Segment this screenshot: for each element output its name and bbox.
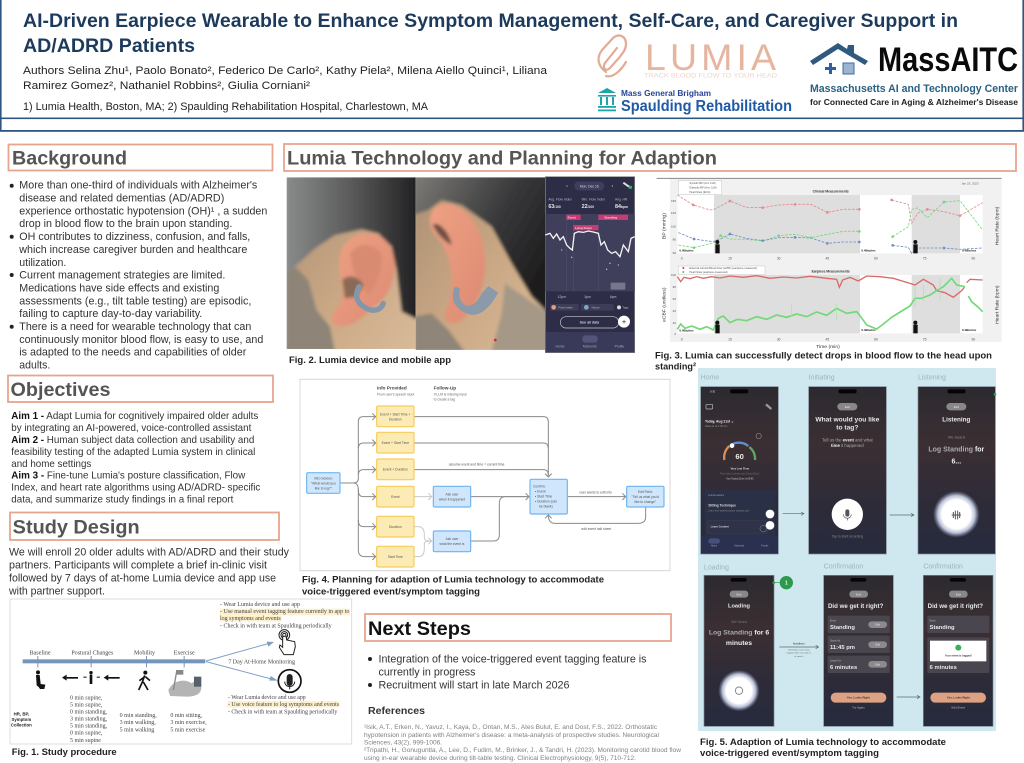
app screenshot: Home <box>592 306 600 310</box>
logo: MassAITC <box>810 41 1019 107</box>
app screenshot: Min. Flow Index <box>582 198 605 202</box>
phone: initiating: time it happened <box>831 443 864 448</box>
text block: background bullets: More than one-third of individuals with Alzheimer's <box>19 180 257 192</box>
text block: next steps: Integration of the voice-triggered event tagging feature is <box>378 654 646 666</box>
text block: next steps <box>368 654 646 692</box>
text block: objectives: feasibility testing of the adapted Lumia system in clinical <box>11 447 255 458</box>
figure 4: flowchart: Ask user <box>446 492 459 496</box>
figure 4: flowchart: Ask user <box>446 537 459 541</box>
text block: background bullets: continuously monitor blood flow, is easy to use, and <box>19 334 263 346</box>
text block: background bullets: experience orthostatic hypotension (OH)¹ , a sudden <box>19 205 267 217</box>
heading: Objectives <box>8 376 273 402</box>
figure 4: flowchart: Info Provided <box>377 386 407 391</box>
heading: Lumia Technology <box>284 144 1016 171</box>
text block: background bullets: utilization. <box>19 257 66 269</box>
text block: background bullets: disease and related dementias (AD/ADRD) <box>19 192 224 204</box>
figure 1: study procedure diagram: 0 min supine, <box>70 695 103 701</box>
icon: green step marker <box>772 576 793 589</box>
app screenshot: Event <box>568 216 576 220</box>
figure 4: flowchart: If LLM is missing input <box>434 393 467 397</box>
figure 3: blood-flow chart: 40 <box>673 309 676 313</box>
icon: microphone <box>278 670 301 692</box>
references: Sciences, 43(2), 999-1006. <box>364 740 442 746</box>
figure 4: flowchart: Start Time <box>388 555 403 559</box>
figure 5: app adaption panel <box>698 368 996 731</box>
figure 1: study procedure diagram: 3 min standing, <box>70 717 108 723</box>
app screenshot: Avg. Flow Index <box>548 198 572 202</box>
phone: listening: Listening <box>942 417 971 424</box>
arrow: autodirect <box>779 642 819 658</box>
figure 4: flowchart: like to log?" <box>315 487 333 491</box>
upper row of screens <box>701 374 996 554</box>
text block: objectives: and home settings <box>11 459 91 470</box>
figure 3: blood-flow chart: 90 <box>971 337 975 341</box>
phone: confirmation tagged: Standing <box>930 625 955 631</box>
app screenshot: Tags <box>622 306 629 310</box>
figure 4: flowchart: Duration <box>389 525 402 529</box>
connectors <box>341 413 646 560</box>
arrow: autodirect: triggered after 3 seconds of <box>787 652 811 655</box>
phone: home: 9:30 <box>710 390 716 394</box>
phone: home: 60 <box>735 452 744 461</box>
figure 4: flowchart: edit event half sheet <box>581 527 611 531</box>
phone: home: Lumia Lessons <box>708 495 725 497</box>
figure 4: flowchart: Event <box>391 495 400 499</box>
phone: home <box>701 387 778 554</box>
phone: confirmation: Edit <box>875 623 880 627</box>
text block: background bullets: failing to capture day-to-day variability. <box>19 308 202 320</box>
figure 4: flowchart: Event + Start Time + <box>380 412 411 416</box>
app screenshot: Flow Index <box>558 306 573 310</box>
figure 1: study procedure diagram: 5 min standing, <box>70 724 108 730</box>
text block: next steps: Recruitment will start in late March 2026 <box>378 680 570 692</box>
arrow <box>890 513 914 517</box>
references <box>364 705 681 762</box>
figure 1: study procedure diagram: HR, BP, <box>14 711 29 716</box>
app screenshot: Avg. HR <box>615 198 628 202</box>
phone: home: Data as of 1:30 pm <box>705 424 728 428</box>
figure 3: blood-flow chart <box>657 178 1002 350</box>
lower row of screens: Loading <box>704 564 729 571</box>
phone: loading: Exit <box>737 593 742 597</box>
text block: objectives: by integrating an AI-powered, voice-controlled assistant <box>11 423 251 434</box>
figure 3: blood-flow chart: 75 <box>923 337 927 341</box>
caption: figure 4: Fig. 4. Planning for adaption of Lumia technology to accommodate <box>302 574 604 586</box>
text block: objectives: Aim 2 - Human subject data collection and usability and <box>11 435 255 446</box>
app screenshot: 84bpm <box>615 204 628 210</box>
references: ²Tripathi, H., Gonuguntla, A., Lee, D., Fudim, M., Brinker, J., & Tandri, H. (2023). Monitoring carotid blood flow <box>364 747 681 754</box>
phone: confirmation tagged: Did we get it right? <box>928 603 983 610</box>
icon: seated person <box>36 670 45 689</box>
icon: hand tap <box>279 630 295 655</box>
chart: clinical measurements: Clinical Measurements <box>813 189 849 193</box>
figure 3: blood-flow chart: 0 <box>674 332 676 336</box>
figure 1: study procedure diagram: log symptoms and events <box>220 616 281 622</box>
phone: confirmation <box>824 575 893 726</box>
app screenshot: 22/100 <box>582 204 594 210</box>
app screenshot: 3pm <box>584 295 591 299</box>
figure 1: study procedure diagram <box>10 599 352 744</box>
phone: initiating: Tell us the event and what <box>822 437 874 442</box>
figure 4: flowchart: Edit Field: <box>638 490 653 494</box>
authors: Ramirez Gomez², Nathaniel Robbins², Giulia Corniani² <box>23 80 310 92</box>
app screenshot: Lying Down <box>575 226 592 230</box>
phone: home: Trends <box>761 545 769 548</box>
figure 3: blood-flow chart: 45 <box>825 337 829 341</box>
logo: Spaulding Rehabilitation: Spaulding Rehabilitation <box>621 98 792 115</box>
phone: confirmation: Lasted For <box>830 659 841 662</box>
phone: home: Moments <box>735 545 745 548</box>
app screenshot: Moments <box>583 344 597 348</box>
text block: background bullets: There is a need for wearable technology that can <box>19 321 251 333</box>
figure 3: blood-flow chart: 60 <box>874 256 878 260</box>
chart: clinical measurements: Heart Rate (ECG) <box>689 190 711 194</box>
arrow: autodirect: no speech <box>794 656 803 658</box>
phone: home: Learn how seated posture impacts your <box>708 510 749 513</box>
chart: earpiece measurements: 0.4Btu/ms <box>679 329 694 333</box>
references: References <box>368 705 425 717</box>
figure 1: study procedure diagram: 5 min supine, <box>70 703 103 709</box>
figure 4: flowchart: Follow-Up <box>434 386 456 391</box>
figure 1: study procedure diagram: Collection <box>11 722 32 727</box>
figure 4: flowchart: be blank) <box>539 505 553 509</box>
title <box>23 10 958 57</box>
figure 1: study procedure diagram: 0 min standing, <box>70 710 108 716</box>
phone: confirmation: Started At <box>830 639 841 642</box>
heading: Background <box>8 144 272 170</box>
phone: home: Home <box>711 546 718 548</box>
arrow: autodirect: Autodirect <box>793 642 805 645</box>
figure 4: flowchart: • Start Time <box>535 495 552 499</box>
phone: loading: Loading <box>728 604 751 610</box>
heading: Study Design <box>10 512 279 540</box>
app screenshot: 12pm <box>558 295 566 299</box>
figure 4: flowchart: Confirm: <box>533 484 546 488</box>
upper row of screens: Home <box>701 374 719 381</box>
figure 3: blood-flow chart: 60 <box>673 251 676 255</box>
figure 1: study procedure diagram: 3 min walking, <box>120 720 156 726</box>
figure 3: blood-flow chart: 0 <box>681 256 683 260</box>
figure 3: blood-flow chart: 15 <box>728 337 732 341</box>
figure 3: blood-flow chart: 15 <box>728 256 732 260</box>
text block: background bullets: Medications have side effects and existing <box>19 282 219 294</box>
figure 1: study procedure diagram: 0 min supine, <box>70 731 103 737</box>
references: hypotension in patients with Alzheimer's disease: a meta-analysis of prospective studies. Neurological <box>364 732 660 739</box>
figure 4: flowchart: assume event and time = current time <box>449 462 505 466</box>
figure 4: flowchart: what the event is <box>440 542 465 546</box>
figure 3: blood-flow chart: 0 <box>681 337 683 341</box>
icon: exercise machine <box>168 670 201 697</box>
chart: earpiece measurements: Earpiece Measurements <box>812 269 850 273</box>
chart: clinical measurements: 0.4Btu/ms <box>679 249 694 253</box>
chart: clinical measurements: Systolic BP (Arm Cuff) <box>689 181 716 185</box>
text block: background bullets: drop in blood flow to the brain upon standing. <box>19 218 232 230</box>
figure 4: flowchart: Event + Start Time <box>382 441 409 445</box>
figure 4: flowchart: like to change" <box>634 500 657 504</box>
figure 1: study procedure diagram: - Wear Lumia device and use app <box>228 695 306 701</box>
heading: Next Steps: Next Steps <box>368 618 471 640</box>
phone: confirmation: Exit <box>856 593 861 597</box>
phone: confirmation tagged: 6 minutes <box>930 665 957 671</box>
figure 4: flowchart: "Tell us what you'd <box>632 495 659 499</box>
phone: confirmation tagged <box>923 575 993 726</box>
lower row of screens: Confirmation <box>824 564 863 571</box>
figure 4: flowchart: • Duration (can <box>535 500 557 504</box>
figure 3: blood-flow chart: 60 <box>874 337 878 341</box>
chart: earpiece measurements: 0.4Btu/ms <box>962 328 977 332</box>
heading: Background: Background <box>12 147 127 169</box>
text block: objectives: data, and summarize study findings in a final report <box>11 494 233 506</box>
figure 1: study procedure diagram: Baseline <box>29 650 51 656</box>
figure 3: blood-flow chart: 45 <box>825 256 829 260</box>
blue screen boxes <box>307 473 664 552</box>
text block: objectives: Aim 3 - Fine-tune Lumia's posture classification, Flow <box>11 471 246 482</box>
app screenshot: Standing <box>604 216 617 220</box>
figure 1: study procedure diagram: - Check in with team at Spaulding periodically <box>228 709 337 715</box>
text block: objectives: Aim 1 - Adapt Lumia for cognitively impaired older adults <box>11 411 258 422</box>
chart: clinical measurements: Jan 23, 2023 <box>961 181 979 185</box>
app screenshot: › <box>612 184 614 189</box>
phone: loading: We heard <box>731 620 747 624</box>
phone: loading: minutes <box>726 640 752 647</box>
text block: background bullets: OH contributes to dizziness, confusion, and falls, <box>19 231 250 243</box>
figure 3: blood-flow chart: 125 <box>671 211 676 215</box>
figure 2: ear photos and app <box>285 175 635 353</box>
icon: green step marker: 1 <box>785 581 788 587</box>
phone: confirmation: Standing <box>830 625 855 631</box>
header frame <box>0 0 1024 132</box>
text block: study design: We will enroll 20 older adults with AD/ADRD and their study <box>9 546 290 558</box>
phone: confirmation: Yes, Looks Right <box>847 696 870 700</box>
phone: loading: Log Standing for 6 <box>709 629 769 636</box>
title: AI-Driven Earpiece Wearable to Enhance Symptom Management, Self-Care, and Caregiver Support in <box>23 10 958 32</box>
phone: confirmation: Try Again <box>852 705 865 709</box>
upper row of screens: Listening <box>918 374 946 381</box>
figure 4: flowchart: "What would you <box>311 482 336 486</box>
figure 3: blood-flow chart: Heart Rate (bpm) <box>994 285 1000 324</box>
phone: confirmation tagged: Your event is logged! <box>945 653 972 657</box>
figure 3: blood-flow chart: 60 <box>673 297 676 301</box>
app screenshot: ‹ <box>566 184 568 189</box>
app screenshot: Profile <box>615 344 624 348</box>
phone: initiating: Tap to start recording <box>832 534 863 538</box>
phone: confirmation: Edit <box>875 662 880 666</box>
figure 3: blood-flow chart: 150 <box>671 199 676 203</box>
app screenshot: Home <box>556 344 565 348</box>
figure 3: blood-flow chart: 80 <box>673 285 676 289</box>
figure 3: blood-flow chart: eCBF (unitless) <box>661 287 667 322</box>
phone: confirmation: 11:45 pm <box>830 645 855 651</box>
text block: background bullets <box>10 180 267 372</box>
app screenshot: Mon, Dec 16 <box>580 184 599 188</box>
figure 4: flowchart: Duration <box>389 417 402 421</box>
figure 3: blood-flow chart: 75 <box>923 256 927 260</box>
phone: listening: We heard <box>948 435 965 440</box>
chart: earpiece measurements <box>677 266 983 333</box>
text block: background bullets: Current management strategies are limited. <box>19 270 225 282</box>
upper row of screens: Initiating <box>809 374 835 381</box>
chart: clinical measurements: 0.4Btu/ms <box>962 249 977 253</box>
authors: Authors Selina Zhu¹, Paolo Bonato², Federico De Carlo², Kathy Piela², Milena Aiello Quinci¹, Liliana <box>23 65 548 77</box>
heading: Objectives: Objectives <box>10 379 111 401</box>
phone: confirmation tagged: Exit <box>956 593 961 597</box>
figure 1: study procedure diagram: Mobility <box>134 650 155 656</box>
affiliations: 1) Lumia Health, Boston, MA; 2) Spaulding Rehabilitation Hospital, Charlestown, MA <box>23 101 429 113</box>
photo: device on ear, side view <box>285 175 418 352</box>
chart: clinical measurements <box>677 181 983 253</box>
figure 1: study procedure diagram: 5 min exercise <box>170 727 206 733</box>
caption: figure 3: Fig. 3. Lumia can successfully detect drops in blood flow to the head upon <box>655 350 992 362</box>
yellow input boxes <box>377 406 414 567</box>
caption: figure 4 <box>302 574 604 598</box>
phone: confirmation: Did we get it right? <box>828 603 884 610</box>
chart: earpiece measurements: 0.4Btu/ms <box>861 328 876 332</box>
figure 1: study procedure diagram: 7 Day At-Home Monitoring <box>228 659 295 665</box>
figure 4: flowchart: From user's speech input <box>377 393 414 397</box>
figure 3: blood-flow chart: Heart Rate (bpm) <box>994 206 1000 245</box>
figure 4: flowchart: when it happened <box>439 497 465 501</box>
figure 1: study procedure diagram: 0 min sitting, <box>170 713 203 719</box>
phone: confirmation: Event <box>830 619 836 622</box>
figure 3: blood-flow chart: 30 <box>777 256 781 260</box>
figure 3: blood-flow chart: 100 <box>671 224 676 228</box>
phone: confirmation tagged: Edit Event <box>952 705 965 709</box>
phone: home: Sitting Technique <box>708 504 736 508</box>
caption: figure 4: voice-triggered event/symptom tagging <box>302 586 480 598</box>
text block: background bullets: is adapted to the needs and capabilities of older <box>19 347 247 359</box>
phone: home: Flow Index is below your Typical Zone <box>720 472 760 475</box>
phone: initiating: Exit <box>845 405 850 409</box>
phone: listening: 6... <box>951 459 961 466</box>
logo: MassAITC: for Connected Care in Aging & Alzheimer's Disease <box>810 97 1018 107</box>
figure 3: blood-flow chart: 30 <box>777 337 781 341</box>
arrow <box>783 512 804 515</box>
heading: Study Design: Study Design <box>13 517 140 539</box>
app screenshot: See all data <box>580 321 600 325</box>
figure 1: study procedure diagram: 5 min walking <box>120 727 154 733</box>
text block: background bullets: assessments (e.g., tilt table testing) are episodic, <box>19 295 251 307</box>
phone: listening <box>918 387 996 554</box>
references: using in-ear wearable device during tilt-table testing. Clinical Electrophysiology, 9(5), 710-712. <box>364 755 636 762</box>
phone: listening: Log Standing for <box>928 447 985 454</box>
caption: figure 2: Fig. 2. Lumia device and mobile app <box>289 355 451 366</box>
text block: background bullets: which increase caregiver burden and healthcare <box>18 244 247 256</box>
title: AD/ADRD Patients <box>23 35 195 57</box>
logo: Spaulding Rehabilitation <box>598 88 792 115</box>
phone: loading <box>704 575 774 726</box>
logo: Lumia: LUMIA <box>645 36 776 78</box>
chart: clinical measurements: 0.4Btu/ms <box>861 249 876 253</box>
figure 1: study procedure diagram: - Use manual event tagging feature currently in app to <box>220 608 349 615</box>
icon: postural sequence <box>62 671 120 684</box>
figure 3: blood-flow chart: 90 <box>971 256 975 260</box>
chart: earpiece measurements: Heart Rate (earpiece-measured) <box>689 270 728 274</box>
logo: Lumia <box>599 36 777 80</box>
icon: walking person <box>139 671 150 690</box>
caption: figure 3: standing² <box>655 362 696 372</box>
caption: figure 1: Fig. 1. Study procedure <box>12 747 117 758</box>
authors <box>23 65 548 92</box>
logo: Lumia: TRACK BLOOD FLOW TO YOUR HEAD <box>644 72 777 80</box>
caption: figure 5: Fig. 5. Adaption of Lumia technology to accommodate <box>700 737 946 748</box>
text block: objectives: Index, and heart rate algorithms using AD/ADRD- specific <box>11 483 260 494</box>
phone: home: Your Typical Zone is 65-85 <box>726 478 754 481</box>
figure 1: study procedure diagram: Exercise <box>174 650 195 656</box>
logo: MassAITC: Massachusetts AI and Technology Center <box>810 83 1019 95</box>
figure 3: blood-flow chart: BP (mmHg) <box>661 213 667 239</box>
figure 4: flowchart <box>300 379 670 571</box>
figure 3: blood-flow chart: 100 <box>671 273 676 277</box>
text block: study design: with partner support. <box>8 585 105 597</box>
app screenshot <box>545 177 635 353</box>
phone: initiating: to tag? <box>836 425 858 432</box>
figure 3: blood-flow chart: Time (min) <box>816 344 840 350</box>
phone: confirmation tagged: Yes, Looks Right <box>947 696 970 700</box>
text block: next steps: currently in progress <box>378 666 476 678</box>
phone: confirmation tagged: Event <box>930 619 936 622</box>
figure 1: study procedure diagram: - Check in with team at Spaulding periodically <box>220 623 332 629</box>
figure 4: flowchart: to create a tag <box>434 398 455 402</box>
phone: home: Learn Content <box>711 524 729 528</box>
photo: device on ear, rear view <box>413 175 548 352</box>
heading: Next Steps <box>365 614 671 641</box>
figure 1: study procedure diagram: 5 min supine <box>70 738 101 744</box>
caption: figure 5: voice-triggered event/symptom tagging <box>700 748 879 759</box>
heading: Lumia Technology: Lumia Technology and Planning for Adaption <box>287 148 717 170</box>
text block: objectives <box>11 411 260 506</box>
caption: figure 5 <box>700 737 946 759</box>
figure 4: flowchart: • Event <box>535 490 546 494</box>
figure 4: flowchart: Intro Screen: <box>314 477 333 481</box>
figure 4: flowchart: Event + Duration <box>383 468 408 472</box>
phone: confirmation: Edit <box>875 643 880 647</box>
caption: figure 3 <box>655 350 992 372</box>
app screenshot: 63/100 <box>548 204 561 210</box>
chart: clinical measurements: Diastolic BP (Arm Cuff) <box>689 185 717 189</box>
phone: initiating: What would you like <box>815 417 880 424</box>
logo: Spaulding Rehabilitation: Mass General Brigham <box>621 89 711 98</box>
figure 1: study procedure diagram: Postural Changes <box>71 650 114 656</box>
app screenshot: + <box>622 317 626 326</box>
phone: listening: Exit <box>954 405 959 409</box>
lower row of screens <box>704 564 993 726</box>
phone: home: Very Low Flow <box>730 467 750 471</box>
text block: study design: followed by 7 days of at-home Lumia device and app use <box>9 572 276 584</box>
references: ¹Isik, A.T., Erken, N., Yavuz, I., Kaya, D., Ontan, M.S., Ates Bulut, E. and Dost, F.S., 2022. Orthostatic <box>364 724 658 731</box>
text block: study design: partners. Participants will complete a brief in-clinic visit <box>9 559 267 571</box>
app screenshot: 6pm <box>610 295 617 299</box>
figure 1: study procedure diagram: - Wear Lumia device and use app <box>220 602 300 608</box>
phone: initiating <box>809 387 886 554</box>
figure 4: flowchart: user wants to edit info <box>579 490 612 494</box>
text block: study design <box>8 546 290 597</box>
phone: home: Today, Aug 21st ⌄ <box>705 419 734 423</box>
arrow <box>897 695 920 699</box>
text block: background bullets: adults. <box>19 360 50 372</box>
chart: earpiece measurements: External Carotid Blood Flow (eCBF) (earpiece-measured) <box>689 266 757 270</box>
figure 3: blood-flow chart: 20 <box>673 321 676 325</box>
lower row of screens: Confirmation <box>923 564 963 571</box>
figure 1: study procedure diagram: 0 min standing, <box>120 713 157 719</box>
phone: confirmation: 6 minutes <box>830 665 857 671</box>
arrow: autodirect: Potentially in processing <box>788 649 809 652</box>
figure 1: study procedure diagram: - Use voice feature to log symptoms and events <box>228 701 340 708</box>
figure 3: blood-flow chart: 80 <box>673 238 676 242</box>
figure 1: study procedure diagram: Symptom <box>11 717 31 722</box>
figure 1: study procedure diagram: 3 min exercise, <box>170 720 207 726</box>
